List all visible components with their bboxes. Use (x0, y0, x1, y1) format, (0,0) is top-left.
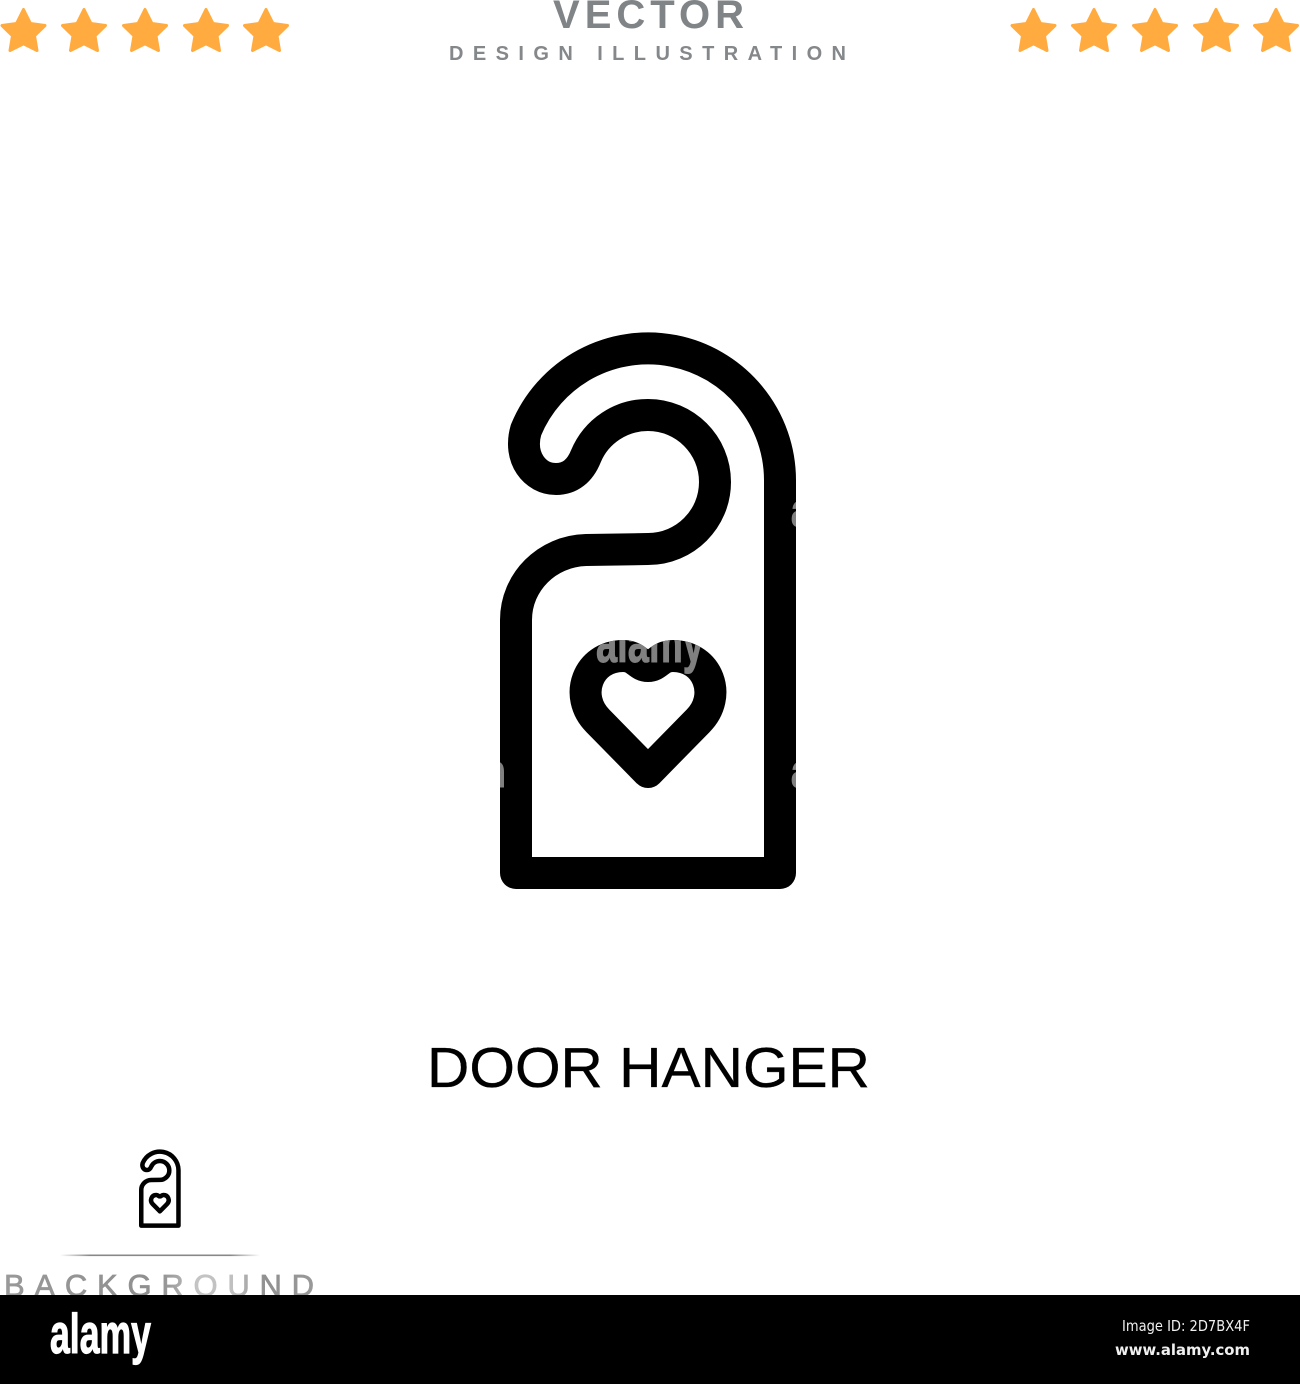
title: door hanger: DOOR HANGER (427, 1036, 870, 1100)
heart outline (586, 656, 710, 772)
alamy logo: alamy (50, 1302, 151, 1365)
website address: www.alamy.com (1115, 1341, 1250, 1359)
subheading: design illustration: DESIGN ILLUSTRATION (449, 43, 846, 65)
watermark fragments on icon: a (791, 484, 811, 536)
small door hanger icon (141, 1152, 178, 1226)
watermark fragments on icon: alamy (596, 611, 704, 674)
label: background: BACKGROUND (4, 1268, 314, 1303)
right five star rating (1012, 10, 1298, 50)
watermark fragments on icon: a (791, 745, 811, 797)
left five star rating (2, 10, 288, 50)
watermark fragments on icon: n (482, 745, 506, 797)
footer bar (0, 1295, 1300, 1384)
watermark fragments on icon (500, 502, 796, 788)
icon: door hanger with heart (516, 348, 780, 873)
door hanger outline (516, 348, 780, 873)
image id: Image ID: 2D7BX4F (1122, 1317, 1250, 1335)
